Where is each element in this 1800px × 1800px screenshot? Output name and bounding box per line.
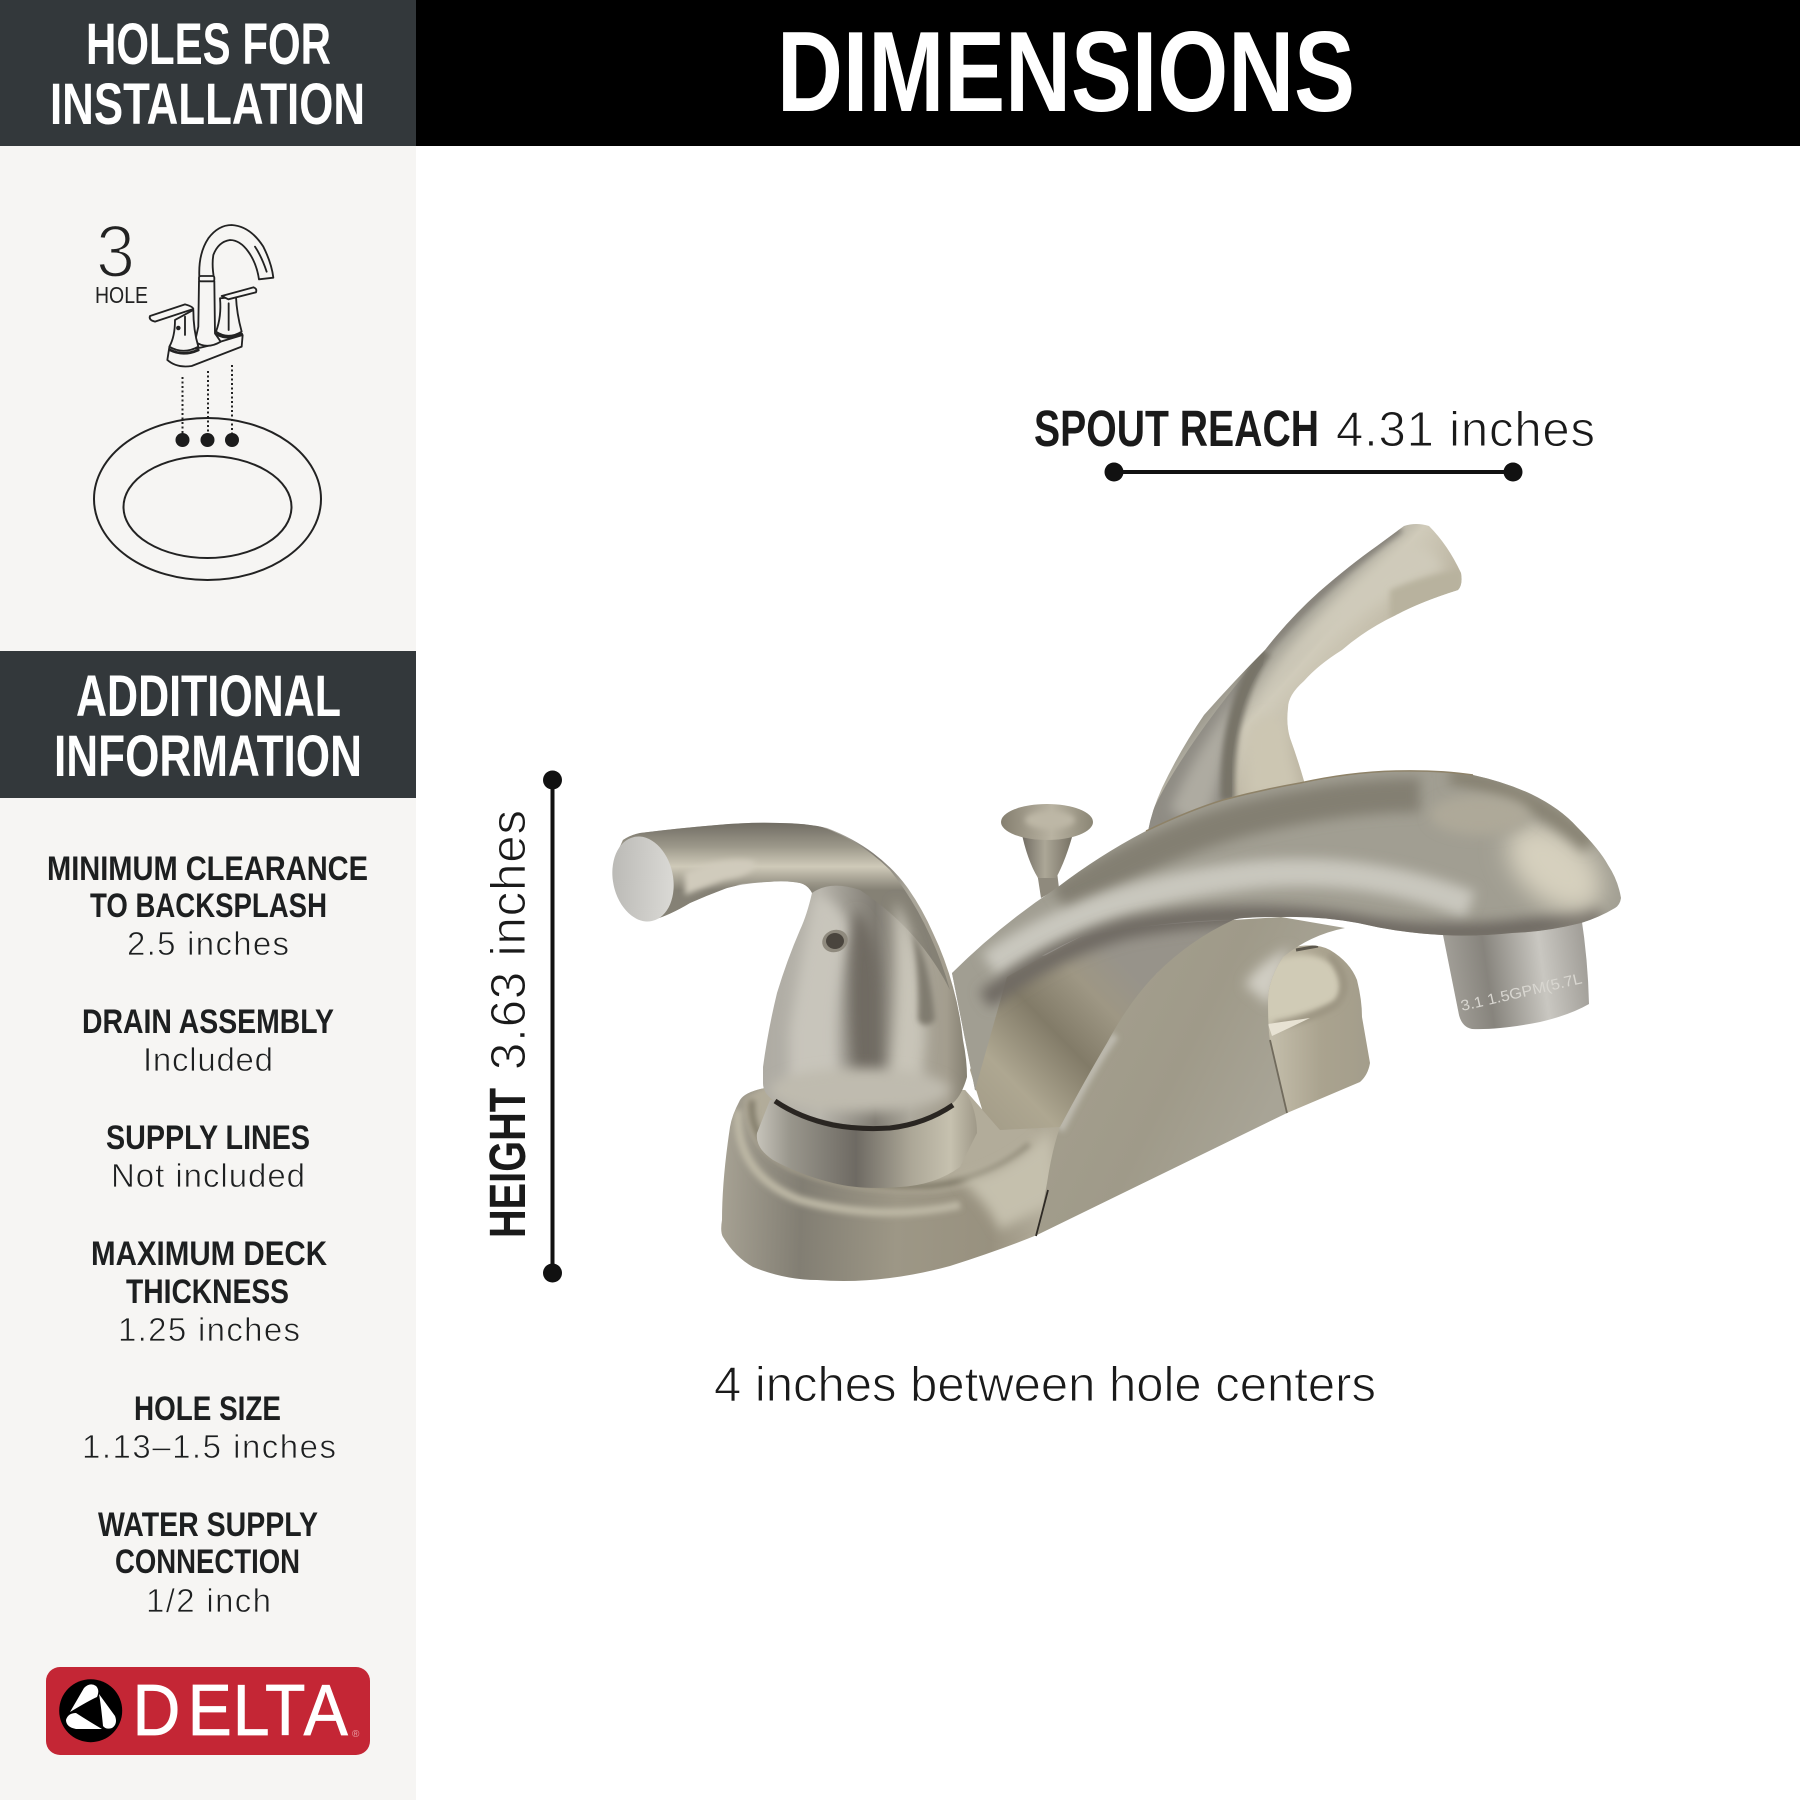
label: 3 hole: HOLE bbox=[95, 282, 148, 308]
spec: drain assembly: DRAIN ASSEMBLY bbox=[82, 1003, 334, 1041]
rear base and valve bbox=[1260, 945, 1370, 1113]
heading: holes for installation: HOLES FOR bbox=[86, 12, 331, 77]
icon: sink basin bbox=[94, 418, 321, 580]
spec: hole size: 1.13–1.5 inches bbox=[82, 1428, 336, 1465]
spec: drain assembly bbox=[82, 1003, 334, 1078]
back handle bbox=[1140, 524, 1462, 850]
spec: water supply connection: WATER SUPPLY bbox=[98, 1506, 318, 1544]
wordmark: delta: DELTA bbox=[132, 1669, 348, 1751]
spec: water supply connection bbox=[98, 1506, 318, 1619]
dimension: hole centers: 4 inches between hole centers bbox=[714, 1358, 1376, 1412]
spec: minimum clearance: MINIMUM CLEARANCE bbox=[47, 850, 368, 888]
neck under spout bbox=[952, 920, 1233, 1127]
spec: water supply connection: 1/2 inch bbox=[146, 1582, 271, 1619]
heading: holes for installation bbox=[0, 0, 416, 146]
logo: delta bbox=[46, 1667, 370, 1755]
illustration: brushed nickel faucet bbox=[605, 524, 1621, 1281]
spec: hole size: HOLE SIZE bbox=[134, 1390, 281, 1428]
left base plate bbox=[721, 1085, 1060, 1281]
aerator bbox=[1442, 915, 1589, 1029]
heading: additional information: INFORMATION bbox=[54, 724, 362, 789]
tan bowl of body bbox=[970, 920, 1233, 1150]
spec: supply lines: Not included bbox=[111, 1157, 305, 1194]
left handle bbox=[605, 818, 967, 1129]
spec: maximum deck thickness: THICKNESS bbox=[126, 1273, 289, 1311]
dimension: height: 3.63 inches bbox=[482, 810, 536, 1070]
spout bbox=[952, 771, 1621, 1090]
spec: minimum clearance: 2.5 inches bbox=[127, 925, 289, 962]
dimension: height bbox=[479, 770, 562, 1282]
dimension: spout reach: 4.31 inches bbox=[1336, 403, 1595, 457]
spec: supply lines: SUPPLY LINES bbox=[106, 1119, 310, 1157]
spec: maximum deck thickness: MAXIMUM DECK bbox=[91, 1235, 327, 1273]
icon: faucet line drawing bbox=[150, 225, 273, 366]
heading: holes for installation: INSTALLATION bbox=[50, 72, 365, 137]
label: 3 hole: 3 bbox=[96, 210, 135, 293]
spec: drain assembly: Included bbox=[143, 1041, 273, 1078]
spec: maximum deck thickness bbox=[91, 1235, 327, 1348]
spec: minimum clearance: TO BACKSPLASH bbox=[90, 887, 327, 925]
dimension: height: HEIGHT bbox=[479, 1088, 536, 1238]
aerator: 3.1 1.5GPM(5.7L bbox=[1459, 970, 1584, 1015]
icon: delta mark bbox=[59, 1679, 122, 1742]
dimension: spout reach bbox=[1034, 400, 1595, 482]
spec: maximum deck thickness: 1.25 inches bbox=[118, 1311, 300, 1348]
title: dimensions: DIMENSIONS bbox=[777, 9, 1355, 136]
arrow: spout reach line bbox=[1104, 462, 1522, 482]
label: 3 hole bbox=[95, 210, 148, 308]
mounting holes bbox=[176, 433, 239, 447]
spec: supply lines bbox=[106, 1119, 310, 1194]
panel: left sidebar bbox=[0, 0, 416, 1800]
spec: hole size bbox=[82, 1390, 336, 1465]
spec: water supply connection: CONNECTION bbox=[115, 1543, 300, 1581]
header bar: dimensions bbox=[416, 0, 1800, 146]
dimension: spout reach: SPOUT REACH bbox=[1034, 400, 1319, 457]
arrow: height line bbox=[543, 770, 562, 1282]
pop-up drain knob bbox=[1001, 804, 1093, 898]
registered mark: ® bbox=[352, 1729, 360, 1740]
front body cover bbox=[1036, 917, 1345, 1236]
heading: additional information bbox=[0, 651, 416, 798]
icon: 3 hole faucet and sink diagram bbox=[94, 210, 321, 580]
spec: minimum clearance bbox=[47, 850, 368, 962]
heading: additional information: ADDITIONAL bbox=[76, 664, 341, 729]
collar bbox=[757, 1090, 977, 1188]
dotted drop lines bbox=[182, 365, 232, 434]
